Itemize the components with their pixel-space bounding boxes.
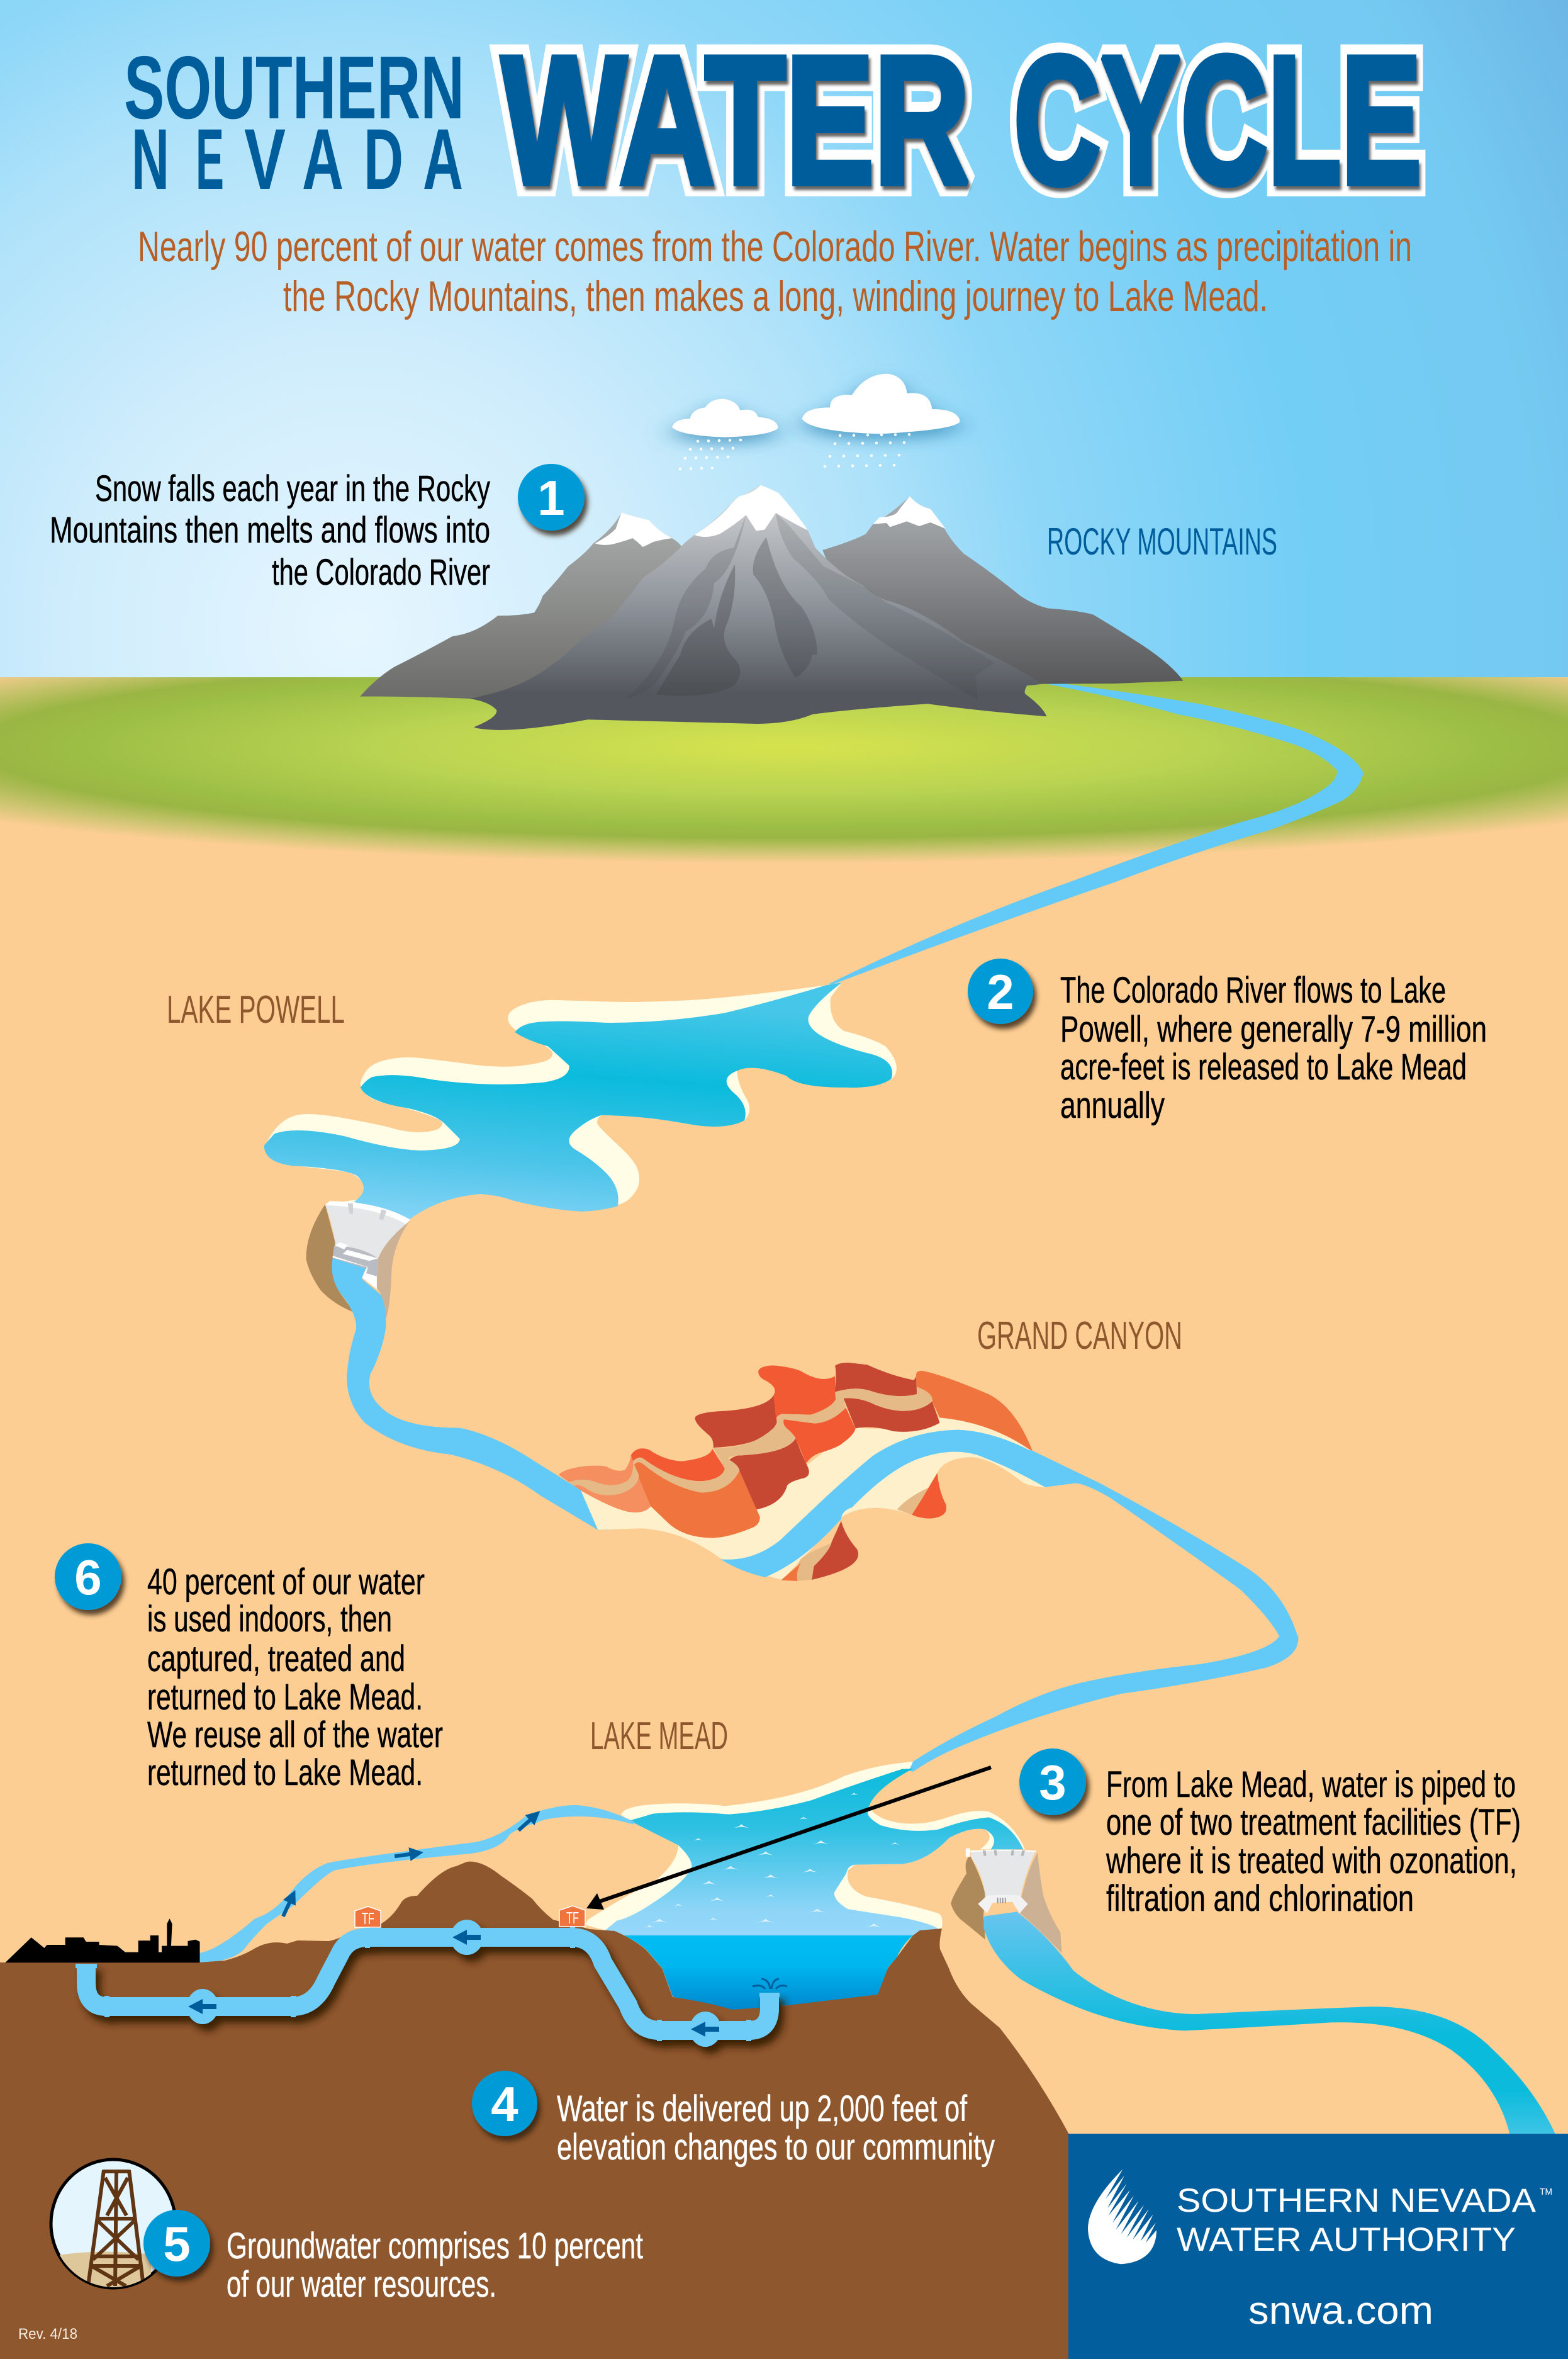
Lake Powell: [264, 982, 897, 1220]
step 6 text: returned to Lake Mead.: [147, 1677, 423, 1718]
Lake Mead: [585, 1762, 1025, 2010]
step 6 text: We reuse all of the water: [147, 1714, 443, 1755]
step 4 text: elevation changes to our community: [557, 2127, 995, 2168]
step 4 badge: [472, 2071, 537, 2136]
title: Water Cycle: WATER: [501, 18, 970, 222]
title: Water Cycle: WATER: [501, 18, 970, 222]
right peak: [822, 496, 1183, 684]
river: canyon to Lake Mead: [902, 1450, 1298, 1772]
panel: SNWA logo: [1068, 2134, 1568, 2359]
lake surface: [605, 1769, 1023, 1935]
step 6 text: captured, treated and: [147, 1638, 405, 1679]
step 2 text: annually: [1060, 1085, 1165, 1126]
pipe medallions: [187, 1920, 721, 2047]
step 5 text: Groundwater comprises 10 percent: [227, 2226, 643, 2266]
icon: well derrick: [38, 2159, 176, 2291]
left peak: [360, 512, 682, 699]
step 4 text: [557, 2088, 995, 2168]
snow caps: [595, 512, 672, 547]
river to Grand Canyon: [347, 1372, 642, 1530]
earth cross-section: [0, 1862, 1069, 2359]
step 1 badge: [518, 464, 585, 531]
step 5 badge: 5: [163, 2216, 191, 2272]
river: mountains to Lake Powell: [830, 682, 1362, 984]
water delivery pipeline: [76, 1920, 787, 2047]
label: Rocky Mountains: ROCKY MOUNTAINS: [1047, 521, 1277, 563]
step 2 text: [1060, 970, 1487, 1126]
green valley ground: [0, 677, 1568, 869]
pipe flow arrows: [188, 1930, 719, 2037]
step 1 text: [50, 468, 490, 593]
step 6 text: is used indoors, then: [147, 1599, 392, 1640]
treatment facility 1: TF: [362, 1909, 374, 1928]
step 6 text: returned to Lake Mead.: [147, 1752, 423, 1793]
arrow to treatment facility: [586, 1767, 991, 1910]
Rocky Mountains illustration: [360, 485, 1183, 730]
step 4 text: Water is delivered up 2,000 feet of: [557, 2088, 968, 2129]
Hoover dam: [951, 1849, 1062, 1953]
icon: rain clouds: [672, 374, 960, 469]
logo wordmark: [1177, 2182, 1552, 2258]
logo wordmark: WATER AUTHORITY: [1177, 2221, 1516, 2258]
step 4 badge: 4: [491, 2076, 518, 2132]
icon: water drop logo: [1088, 2170, 1156, 2264]
lake water: [264, 982, 892, 1220]
label: Grand Canyon: GRAND CANYON: [977, 1314, 1182, 1358]
center peak: [469, 485, 1046, 730]
step 6 text: [147, 1562, 443, 1793]
step 2 badge: 2: [987, 964, 1014, 1020]
title: Southern Nevada: A: [302, 111, 344, 208]
title: Southern Nevada: [124, 38, 464, 208]
treatment facility 1: [355, 1906, 381, 1928]
treatment facility 2: [559, 1906, 585, 1927]
flow arrows: [277, 1806, 545, 1919]
intro text: [138, 223, 1412, 320]
step 5 text: [227, 2226, 643, 2305]
label: Lake Mead: LAKE MEAD: [590, 1714, 728, 1758]
return flow to Lake Mead: [200, 1806, 634, 1962]
skyline: Las Vegas: [5, 1918, 200, 1962]
river below dam: [332, 1258, 386, 1372]
step 3 text: [1106, 1764, 1521, 1919]
revision note: Rev. 4/18: [18, 2326, 77, 2343]
river through canyon: [720, 1430, 1070, 1577]
treatment facility 2: TF: [566, 1908, 579, 1927]
river below Hoover dam: [983, 1911, 1556, 2136]
step 6 badge: [55, 1543, 121, 1610]
step 2 badge: [968, 959, 1033, 1024]
step 1 text: Mountains then melts and flows into: [50, 510, 490, 551]
title: [124, 18, 1421, 222]
label: Lake Powell: LAKE POWELL: [167, 988, 345, 1032]
background: sky: [0, 0, 1568, 678]
Grand Canyon: [559, 1363, 1070, 1581]
step 5 badge: [143, 2210, 210, 2277]
step 6 text: 40 percent of our water: [147, 1562, 425, 1602]
step 5 text: of our water resources.: [227, 2264, 496, 2305]
title: Southern Nevada: E: [196, 111, 224, 208]
logo wordmark: SOUTHERN NEVADA: [1177, 2182, 1537, 2219]
step 1 text: Snow falls each year in the Rocky: [95, 468, 490, 509]
title: Southern Nevada: N: [132, 111, 169, 208]
step 1 badge: 1: [537, 470, 565, 526]
title: Southern Nevada: D: [364, 111, 403, 208]
title: Southern Nevada: A: [423, 111, 463, 208]
canyon floor: [581, 1417, 1044, 1580]
mountain ridges: [626, 513, 995, 701]
logo wordmark: TM: [1540, 2187, 1552, 2197]
Glen Canyon dam: [306, 1201, 410, 1372]
deep lake cross-section: [624, 1935, 913, 2010]
title: Southern Nevada: V: [244, 111, 286, 208]
intake spray: [753, 1979, 787, 1989]
step 3 badge: 3: [1039, 1755, 1067, 1810]
step 3 text: filtration and chlorination: [1106, 1878, 1414, 1919]
canyon rocks: [559, 1363, 1033, 1581]
title: Southern Nevada: SOUTHERN: [124, 38, 464, 138]
website: snwa.com: [1248, 2289, 1433, 2333]
step 3 badge: [1019, 1748, 1086, 1815]
waves: [644, 1793, 900, 1928]
lake shoreline: [266, 982, 897, 1220]
lake shoreline: [585, 1762, 1025, 1935]
step 1 text: the Colorado River: [272, 552, 490, 593]
step 6 badge: 6: [74, 1550, 102, 1605]
